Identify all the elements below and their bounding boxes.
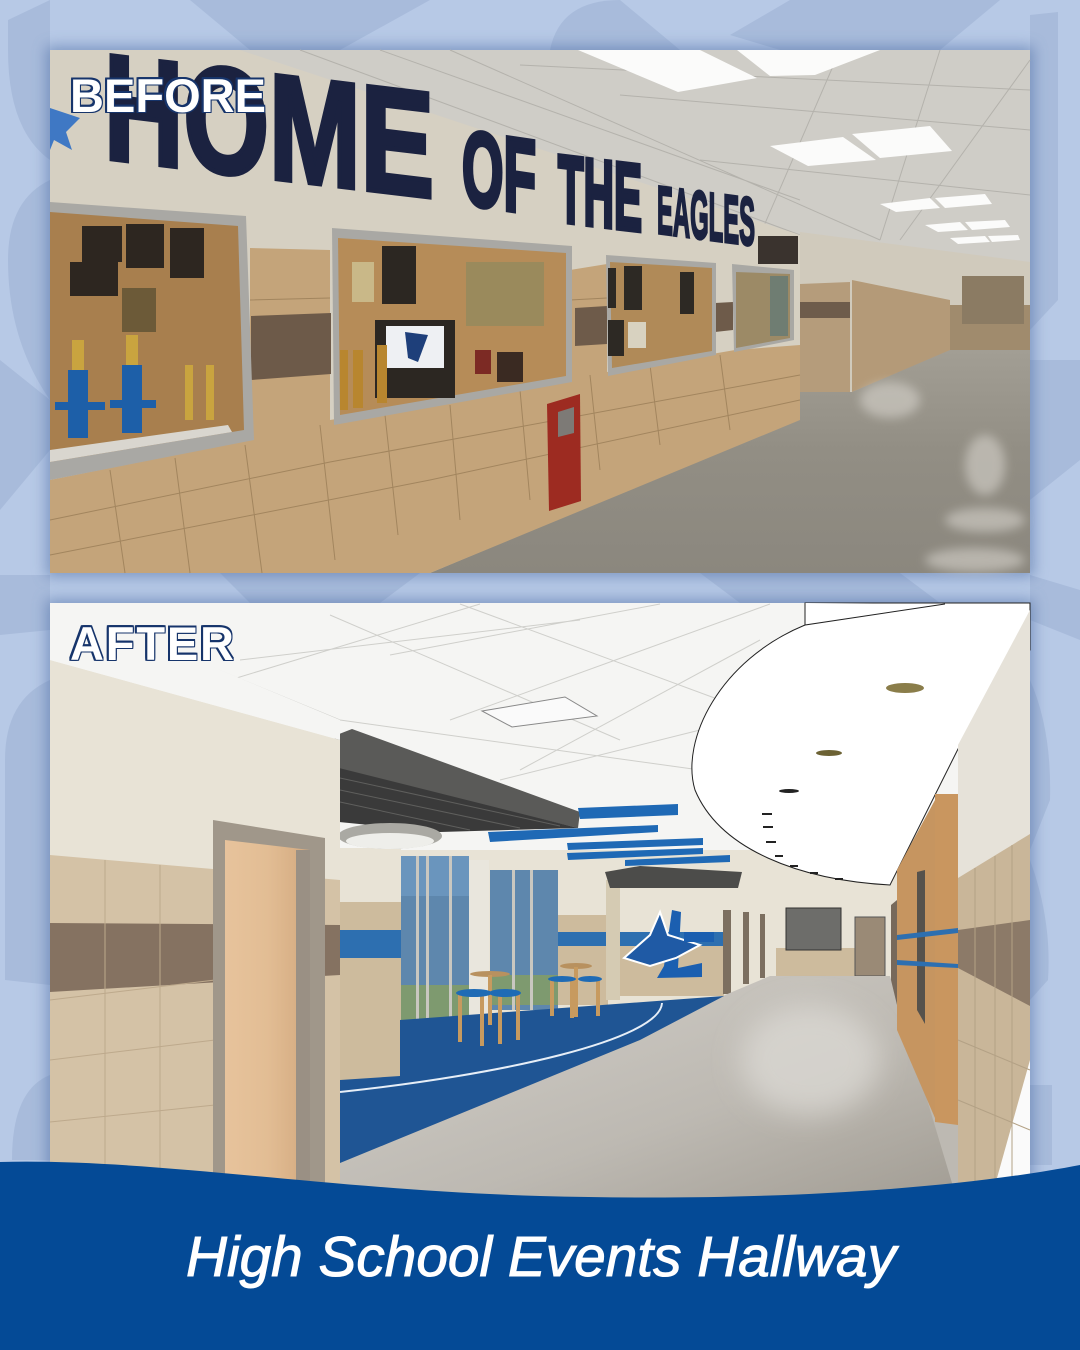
panel shadow (46, 599, 1034, 1199)
panel shadow (46, 46, 1034, 577)
wall lettering: HOME (104, 22, 434, 229)
eagle logo (624, 910, 714, 978)
window right (490, 870, 558, 1010)
bar tables (456, 963, 602, 1046)
blue carpet (340, 996, 724, 1163)
white ceiling (50, 603, 1030, 903)
corridor doors and far wall (723, 892, 889, 994)
wood wall panels (891, 794, 958, 1125)
ceiling panel (482, 697, 597, 727)
curved soffit (692, 603, 1030, 885)
display case 2 (332, 228, 572, 425)
ceiling grid (300, 50, 1030, 240)
window left (401, 856, 469, 1021)
red door (547, 394, 581, 511)
right wall (958, 610, 1030, 1203)
blue ceiling baffles (488, 804, 730, 866)
dark tile band (251, 313, 331, 380)
icon: ribbon bow (50, 108, 80, 150)
far corridor tile wall (800, 282, 850, 392)
title: High School Events Hallway (186, 1225, 899, 1289)
terrazzo floor (320, 976, 958, 1203)
display case 1 (50, 202, 254, 480)
display case 4 (732, 264, 794, 352)
wall lettering: OF (462, 109, 536, 237)
left wall (50, 660, 340, 1203)
ceiling (50, 50, 1030, 573)
floor (430, 350, 1030, 573)
upper wall (50, 50, 800, 480)
wall plaques (758, 236, 798, 264)
wall lettering (104, 22, 755, 261)
label: after: AFTER (70, 617, 234, 670)
column between (469, 860, 489, 1020)
left wall top (50, 603, 340, 740)
footer wave banner (0, 1162, 1080, 1350)
panel: before photo (46, 22, 1034, 577)
tile wall (50, 248, 800, 573)
wall lettering: THE (558, 136, 642, 252)
label: before: BEFORE (70, 69, 266, 122)
display case 3 (606, 255, 716, 376)
door (213, 820, 325, 1203)
column left (340, 848, 401, 1080)
ceiling lights (578, 50, 1020, 244)
far corridor wall (800, 232, 1030, 420)
floor reflection (740, 1005, 880, 1115)
ring light (338, 823, 442, 849)
back wall tile band (558, 880, 724, 1005)
ceiling grid (60, 604, 770, 780)
floor reflections (860, 382, 1025, 572)
back wall (340, 850, 900, 1020)
panel: before photo: EAGLES (657, 172, 755, 261)
panel base (50, 603, 1030, 1203)
panel: after rendering (46, 599, 1034, 1203)
ceiling canopy dark (334, 729, 742, 888)
